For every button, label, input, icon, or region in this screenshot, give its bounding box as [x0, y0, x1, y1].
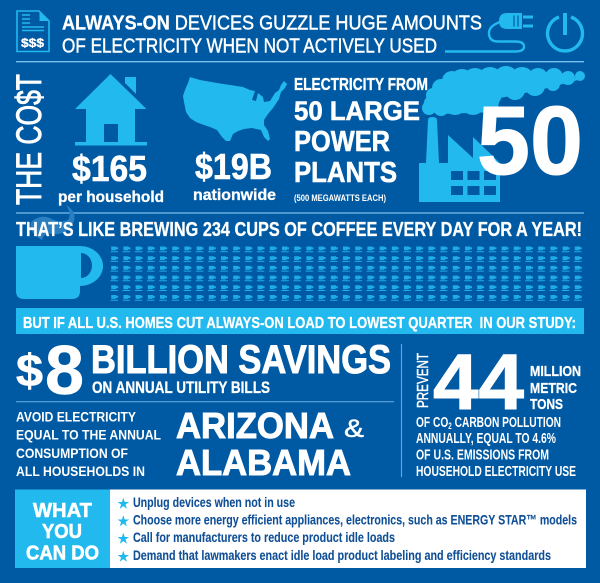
emissions: PREVENT [415, 353, 432, 408]
emissions: 44 [433, 337, 524, 426]
icon: power button [548, 13, 582, 51]
power plants text [294, 74, 428, 204]
states: & [344, 415, 364, 443]
emissions: OF CO [416, 415, 462, 431]
savings: ON ANNUAL UTILITY BILLS [92, 378, 270, 397]
icon: factory with smoke [419, 66, 585, 202]
national stat: $19B [195, 146, 272, 187]
savings: BILLION SAVINGS [91, 338, 391, 382]
title: ALWAYS-ON DEVICES GUZZLE HUGE AMOUNTS [62, 12, 482, 34]
house stat [58, 74, 164, 206]
banner [16, 308, 584, 334]
emissions: TONS [530, 396, 563, 413]
action list: ★ [118, 549, 130, 564]
panel: what you can do: CAN DO [26, 542, 99, 564]
action list [118, 494, 577, 564]
avoid electricity text: CONSUMPTION OF [16, 446, 128, 461]
action list: Unplug devices when not in use [133, 494, 295, 510]
avoid electricity text: AVOID ELECTRICITY [16, 410, 136, 424]
title: OF ELECTRICITY WHEN NOT ACTIVELY USED [62, 36, 437, 58]
icon: electricity bill: $$$ [21, 36, 44, 50]
icon: house [75, 74, 147, 146]
house stat: per household [58, 189, 164, 206]
states: ALABAMA [176, 442, 351, 483]
national stat [183, 77, 287, 204]
power plants text: ELECTRICITY FROM [294, 74, 428, 94]
states: ARIZONA [176, 405, 334, 446]
house stat: $165 [72, 148, 147, 189]
power plants text: PLANTS [294, 157, 397, 189]
emissions: MILLION [530, 363, 581, 380]
national stat: nationwide [193, 187, 276, 204]
title [62, 12, 482, 58]
icon: steam [30, 205, 74, 240]
emissions [415, 337, 581, 480]
action list: ★ [118, 531, 130, 546]
panel: what you can do [15, 490, 586, 568]
emissions: 2 [448, 421, 452, 431]
power plants text: POWER [294, 126, 390, 158]
power plants text: 50 LARGE [294, 96, 420, 126]
avoid electricity text: EQUAL TO THE ANNUAL [16, 428, 161, 442]
small cups grid [110, 246, 582, 301]
icon: coffee mug [16, 246, 103, 299]
savings: 8 [45, 331, 84, 409]
action list: ★ [118, 496, 130, 511]
heading: the cost: THE CO$T [10, 74, 49, 205]
divider [16, 344, 402, 477]
avoid electricity text [16, 410, 161, 479]
divider [16, 62, 584, 213]
icon: US map [183, 77, 287, 141]
panel: what you can do: YOU [42, 521, 82, 543]
savings [16, 331, 391, 409]
action list: ★ [118, 514, 130, 528]
states [176, 405, 364, 483]
power plants text: (500 MEGAWATTS EACH) [294, 193, 386, 204]
action list: Call for manufacturers to reduce product idle loads [133, 529, 395, 545]
emissions: OF U.S. EMISSIONS FROM [416, 448, 549, 464]
big number 50: 50 [477, 86, 583, 195]
icon: electricity bill [17, 11, 49, 52]
avoid electricity text: ALL HOUSEHOLDS IN [16, 464, 145, 479]
emissions: METRIC [530, 380, 577, 397]
savings: $ [16, 345, 43, 396]
panel: what you can do: WHAT [33, 500, 92, 522]
icon: plug [445, 13, 533, 52]
